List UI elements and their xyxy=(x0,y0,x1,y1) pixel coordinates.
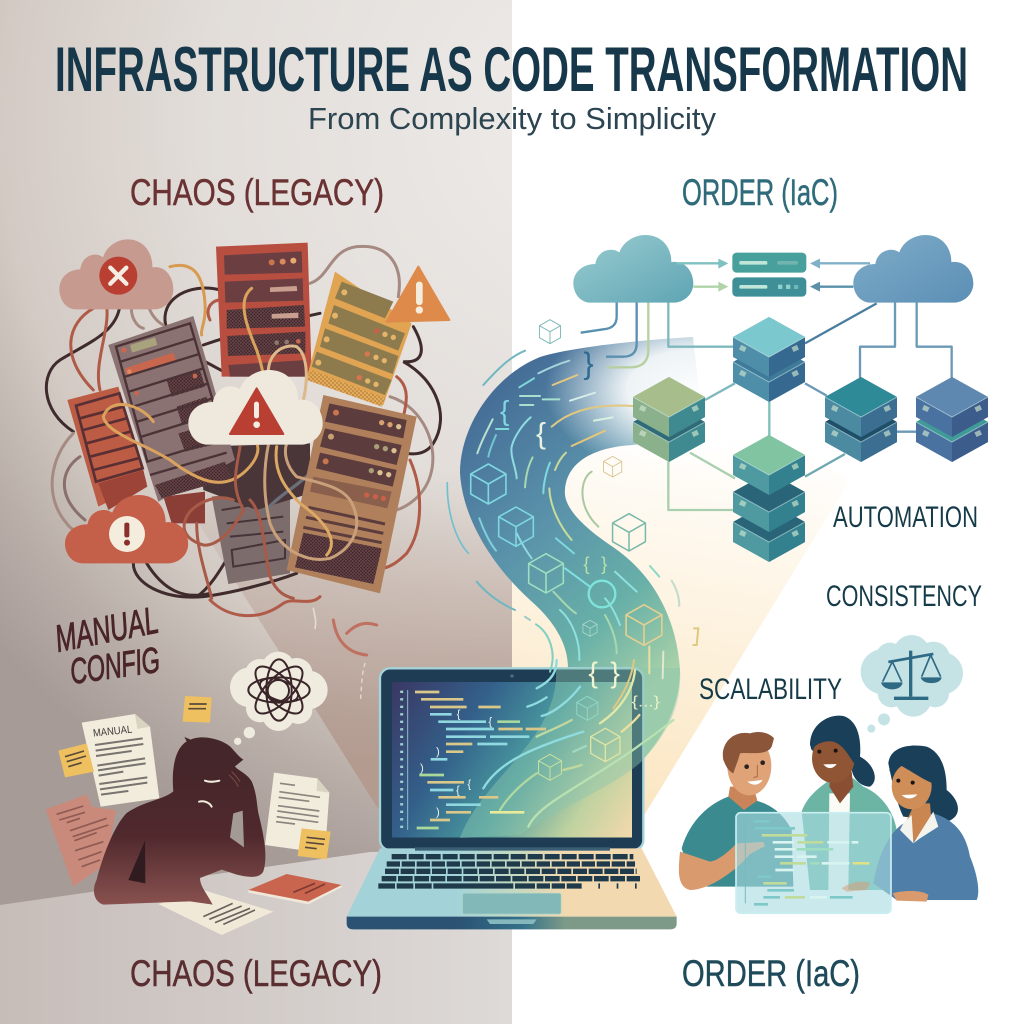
scene: collaborating team xyxy=(679,635,978,913)
sticky note xyxy=(58,743,94,777)
heading: order top: ORDER (IaC) xyxy=(682,172,838,213)
background: chaos side xyxy=(0,0,512,1024)
base deck xyxy=(347,848,677,917)
brace glyphs: { } xyxy=(588,658,620,690)
server stack: green bottom xyxy=(733,435,805,562)
laptop screen display xyxy=(392,682,632,838)
sticky note xyxy=(298,828,331,859)
person: woman in blue shirt xyxy=(873,746,978,902)
hand-written note: manual config xyxy=(52,600,162,692)
front cables xyxy=(103,288,357,598)
cube icons on screen xyxy=(539,696,620,780)
ribbon fade into order side xyxy=(545,300,845,480)
notch xyxy=(487,919,537,924)
code lines xyxy=(402,690,546,830)
trackpad xyxy=(463,893,561,914)
manual document xyxy=(82,714,159,807)
central server bars and arrows xyxy=(677,253,870,297)
brace glyphs: { } xyxy=(583,553,607,574)
flow dashes xyxy=(447,351,698,708)
brace glyphs: { xyxy=(500,395,509,426)
data streams on screen xyxy=(483,660,673,827)
hand-written note: manual config: MANUAL xyxy=(52,600,162,661)
webcam xyxy=(510,674,514,678)
code brackets xyxy=(420,708,492,819)
server: grey rack xyxy=(108,316,235,502)
document xyxy=(265,773,329,853)
code brackets: { xyxy=(467,778,471,790)
thought bubble: tangled thoughts xyxy=(230,652,328,745)
desk: chaos side xyxy=(0,850,512,1024)
code brackets: ) xyxy=(420,763,424,775)
heading: chaos top: CHAOS (LEGACY) xyxy=(130,172,384,213)
connector lines xyxy=(581,302,952,510)
order network: clouds, servers and connectors xyxy=(573,235,973,510)
server stack: top centre xyxy=(733,317,805,402)
code brackets: { xyxy=(488,716,492,728)
scene: stressed engineer xyxy=(46,652,342,935)
brace glyphs: } xyxy=(583,346,594,380)
base lip xyxy=(347,917,677,929)
cube icons xyxy=(471,320,662,645)
subtitle: From Complexity to Simplicity xyxy=(308,101,716,136)
red book xyxy=(248,874,342,904)
pink document xyxy=(46,794,116,887)
back cables xyxy=(46,246,441,597)
ribbon overlay on laptop xyxy=(460,668,680,838)
code brackets: { xyxy=(457,708,461,720)
heading: chaos bottom: CHAOS (LEGACY) xyxy=(130,953,382,994)
icon: warning cloud xyxy=(188,370,323,445)
server: yellow rack xyxy=(307,272,412,407)
ribbon details: dashes, cubes and braces xyxy=(447,320,698,708)
desk paper xyxy=(158,890,273,935)
code brackets: ) xyxy=(436,807,440,819)
hand-written note: manual config: CONFIG xyxy=(67,639,162,692)
brace glyphs: {...} xyxy=(632,695,660,711)
light beam: chaos side xyxy=(140,430,512,900)
sticky note xyxy=(183,696,212,723)
label: scalability: SCALABILITY xyxy=(699,673,842,706)
code brackets: { xyxy=(456,784,460,796)
laptop lid xyxy=(380,668,643,850)
thought bubble: balance scale xyxy=(861,635,963,733)
person silhouette xyxy=(94,737,265,905)
server: dark rear rack xyxy=(163,443,310,584)
icon: alert cloud xyxy=(65,495,188,563)
stray cable fragments xyxy=(210,597,377,698)
hinge xyxy=(415,847,610,851)
icon: cloud right xyxy=(853,235,973,303)
manual document: MANUAL xyxy=(92,724,133,740)
server stack: blue far right xyxy=(916,377,988,462)
background: order side xyxy=(512,0,1024,1024)
icon: cloud left xyxy=(573,235,693,303)
person: woman with braid xyxy=(802,716,897,890)
flow ribbon: chaos to order xyxy=(460,337,700,763)
keyboard xyxy=(378,857,645,886)
heading: order bottom: ORDER (IaC) xyxy=(682,953,860,994)
server: brown rack xyxy=(287,395,417,593)
icon: failed cloud xyxy=(59,239,173,309)
server stack: teal right xyxy=(825,377,897,462)
brace glyphs: { xyxy=(536,417,546,450)
code brackets: ) xyxy=(436,746,440,758)
server: red rack xyxy=(216,243,312,377)
server: left red rack xyxy=(67,387,147,510)
light beam: order side xyxy=(512,390,850,822)
person: man xyxy=(679,732,793,890)
laptop base xyxy=(347,660,677,929)
brace glyphs xyxy=(500,346,620,690)
chaos cluster: servers, cables and alert clouds xyxy=(46,239,449,598)
server stack: olive left xyxy=(633,377,705,462)
holographic code panel xyxy=(736,813,891,913)
icon: warning triangle xyxy=(387,267,449,322)
